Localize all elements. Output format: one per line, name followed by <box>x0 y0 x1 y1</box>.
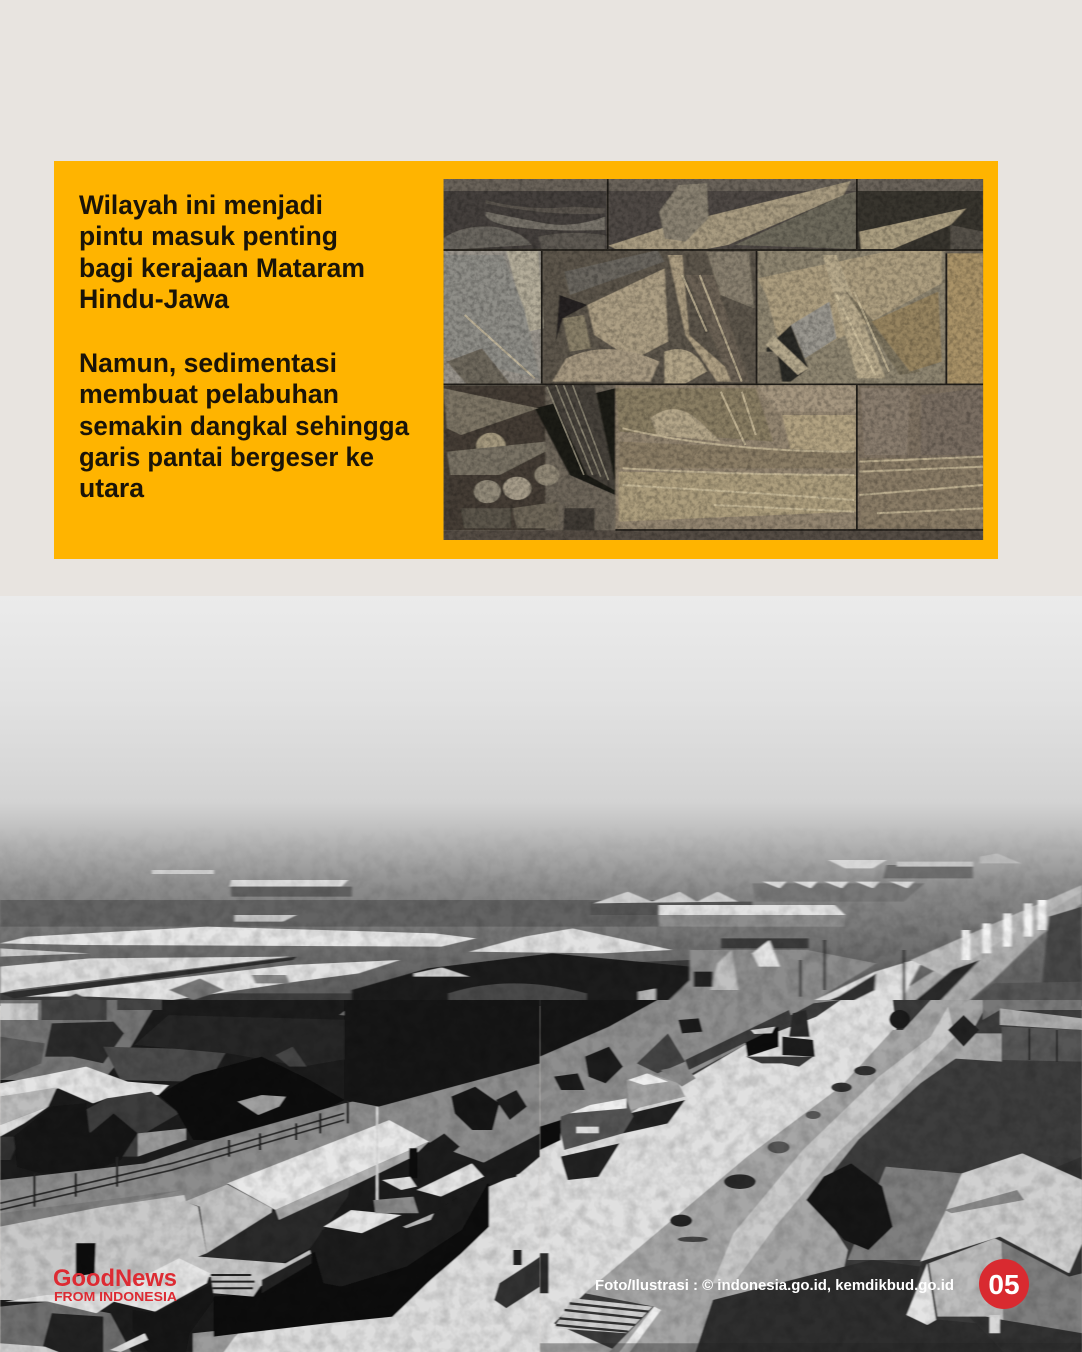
rowing boat edge <box>540 1253 549 1293</box>
text block: first paragraph: bagi kerajaan Mataram <box>79 253 365 283</box>
logo: GoodNews from Indonesia <box>53 1265 177 1304</box>
tied boats <box>744 1027 779 1057</box>
ground <box>0 1195 214 1300</box>
chimney <box>76 1243 96 1277</box>
sky and distant haze <box>0 596 1082 1006</box>
text block: second paragraph: garis pantai bergeser ke <box>79 442 374 472</box>
trees along quay <box>451 1087 499 1130</box>
road <box>904 892 1082 1000</box>
steamship <box>313 1180 487 1287</box>
pier and stairs <box>200 1250 312 1297</box>
water <box>540 1000 896 1352</box>
shed <box>227 1120 429 1210</box>
hull and joint lines <box>465 275 983 513</box>
text block: first paragraph: Wilayah ini menjadi <box>79 190 323 220</box>
canal <box>814 960 922 1000</box>
panel: orange text and relief panel <box>54 161 998 559</box>
tent <box>920 1153 1082 1273</box>
quay head <box>667 950 876 1000</box>
rudder ribs <box>547 385 608 480</box>
stairs <box>554 1298 652 1333</box>
image: stone relief of a ship <box>444 179 983 540</box>
masts and rigging <box>911 885 1082 977</box>
barge with white roof <box>0 1302 131 1352</box>
text block: second paragraph <box>79 348 410 503</box>
text block: first paragraph: pintu masuk penting <box>79 221 338 251</box>
photo credit caption: Foto/Ilustrasi : © indonesia.go.id, kemdikbud.go.id <box>595 1277 954 1294</box>
page number badge <box>979 1259 1029 1309</box>
lower right: canal, road, warehouse and tent <box>540 1000 1082 1352</box>
moored paddle steamers <box>626 1073 685 1110</box>
far shore: ponds, warehouses, canal head <box>0 853 1082 1013</box>
text block: second paragraph: semakin dangkal sehingga <box>79 411 410 441</box>
page number badge: 05 <box>988 1269 1020 1300</box>
road <box>585 1000 990 1352</box>
rails band <box>0 1060 540 1223</box>
road mounds <box>854 1066 876 1075</box>
text block: first paragraph: Hindu-Jawa <box>79 284 230 314</box>
lower left: buildings, shed and steamship <box>0 1000 540 1352</box>
text block: second paragraph: utara <box>79 473 145 503</box>
logo: GoodNews from Indonesia: FROM INDONESIA <box>54 1290 177 1304</box>
image: historic black and white harbour photograph <box>0 596 1082 1352</box>
water <box>220 1157 540 1352</box>
text block: second paragraph: Namun, sedimentasi <box>79 348 337 378</box>
rowing boat <box>494 1257 540 1308</box>
quay <box>540 1000 841 1137</box>
logo: GoodNews from Indonesia: GoodNews <box>53 1265 177 1292</box>
text block: first paragraph <box>79 190 365 314</box>
warehouse <box>1000 1008 1082 1030</box>
right vegetation <box>858 1000 1082 1173</box>
text block: second paragraph: membuat pelabuhan <box>79 379 339 409</box>
